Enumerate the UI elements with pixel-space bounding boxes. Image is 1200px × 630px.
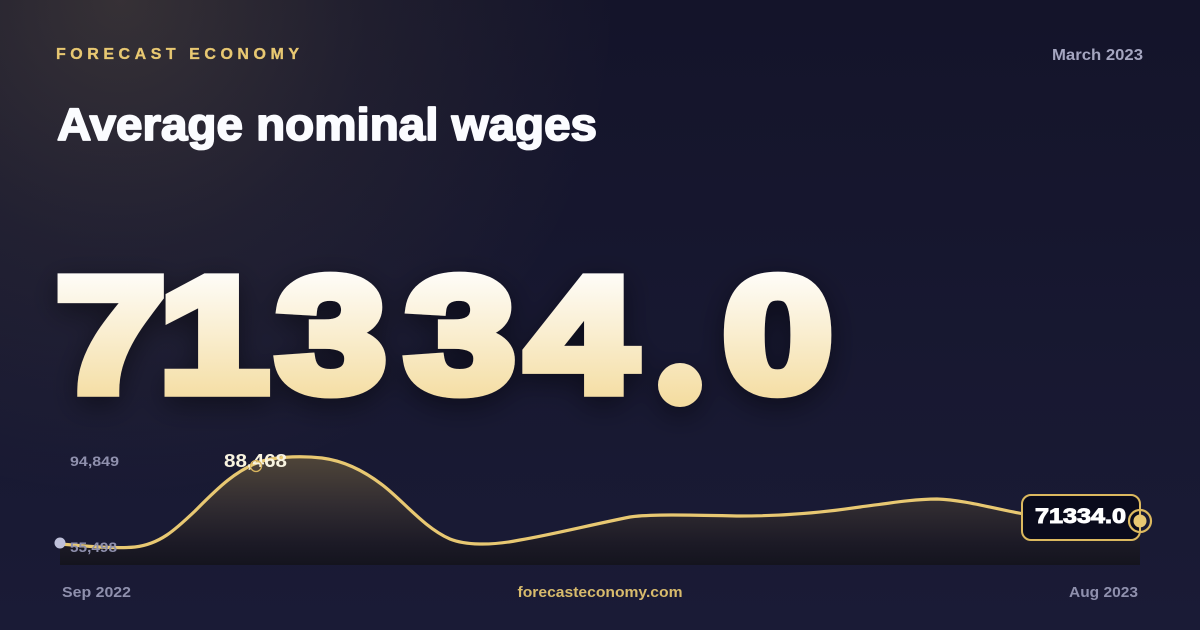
end point marker — [1129, 510, 1151, 532]
end date: Aug 2023 — [1069, 584, 1138, 601]
start point marker — [54, 538, 66, 548]
title: Average nominal wages — [57, 99, 597, 150]
peak marker — [250, 460, 262, 472]
site footer: forecasteconomy.com — [518, 584, 682, 601]
start date: Sep 2022 — [62, 584, 131, 601]
peak value label: 88,468 — [224, 451, 287, 471]
chart area fill — [60, 457, 1140, 565]
axis max label: 94,849 — [70, 454, 119, 469]
chart line — [60, 457, 1140, 548]
axis min label: 55,498 — [70, 540, 118, 555]
current value callout — [1022, 495, 1140, 540]
date label: March 2023 — [1052, 47, 1143, 64]
current value callout: 71334.0 — [1035, 505, 1126, 528]
big value: 71334.0 — [56, 244, 833, 426]
area chart — [60, 457, 1140, 565]
brand label: FORECAST ECONOMY — [56, 46, 299, 63]
